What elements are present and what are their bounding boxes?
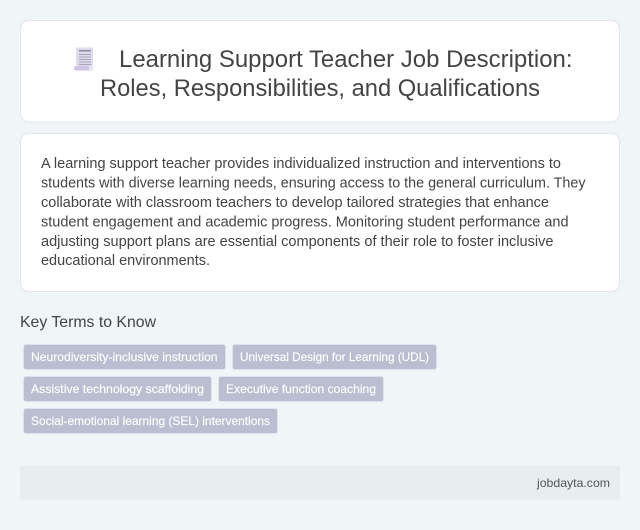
icon: document scroll (74, 48, 93, 71)
chip: neurodiversity: Neurodiversity-inclusive instruction (31, 350, 218, 364)
chip: neurodiversity (24, 344, 226, 370)
panel: description card (20, 134, 620, 292)
footer: jobdayta.com (536, 476, 610, 490)
text block: description: students with diverse learning needs, ensuring access to the general curriculum. They (41, 176, 586, 192)
chip: assistive technology (24, 376, 212, 402)
title: Roles, Responsibilities, and Qualifications (100, 75, 540, 102)
title (100, 46, 572, 102)
text block: description: A learning support teacher provides individualized instruction and interventions to (41, 156, 561, 172)
chip: UDL (232, 344, 436, 370)
text block: description: student engagement and academic progress. Monitoring student performance and (41, 214, 568, 230)
chip: UDL: Universal Design for Learning (UDL) (240, 350, 429, 364)
footer (20, 466, 620, 500)
chip: social-emotional learning: Social-emotional learning (SEL) interventions (31, 414, 270, 428)
title: Learning Support Teacher Job Description: (119, 46, 572, 73)
text block: description: educational environments. (41, 253, 210, 269)
chip: social-emotional learning (24, 408, 278, 434)
chip: executive function (218, 376, 384, 402)
chip: assistive technology: Assistive technology scaffolding (31, 382, 204, 396)
chip group: key terms (24, 344, 436, 434)
panel: header card (20, 20, 620, 122)
heading: key terms: Key Terms to Know (20, 314, 156, 331)
text block: description (41, 156, 586, 269)
chip: executive function: Executive function coaching (226, 382, 376, 396)
text block: description: adjusting support plans are essential components of their role to foster inclusive (41, 234, 554, 250)
text block: description: collaborate with classroom teachers to develop tailored strategies that enhance (41, 195, 549, 211)
